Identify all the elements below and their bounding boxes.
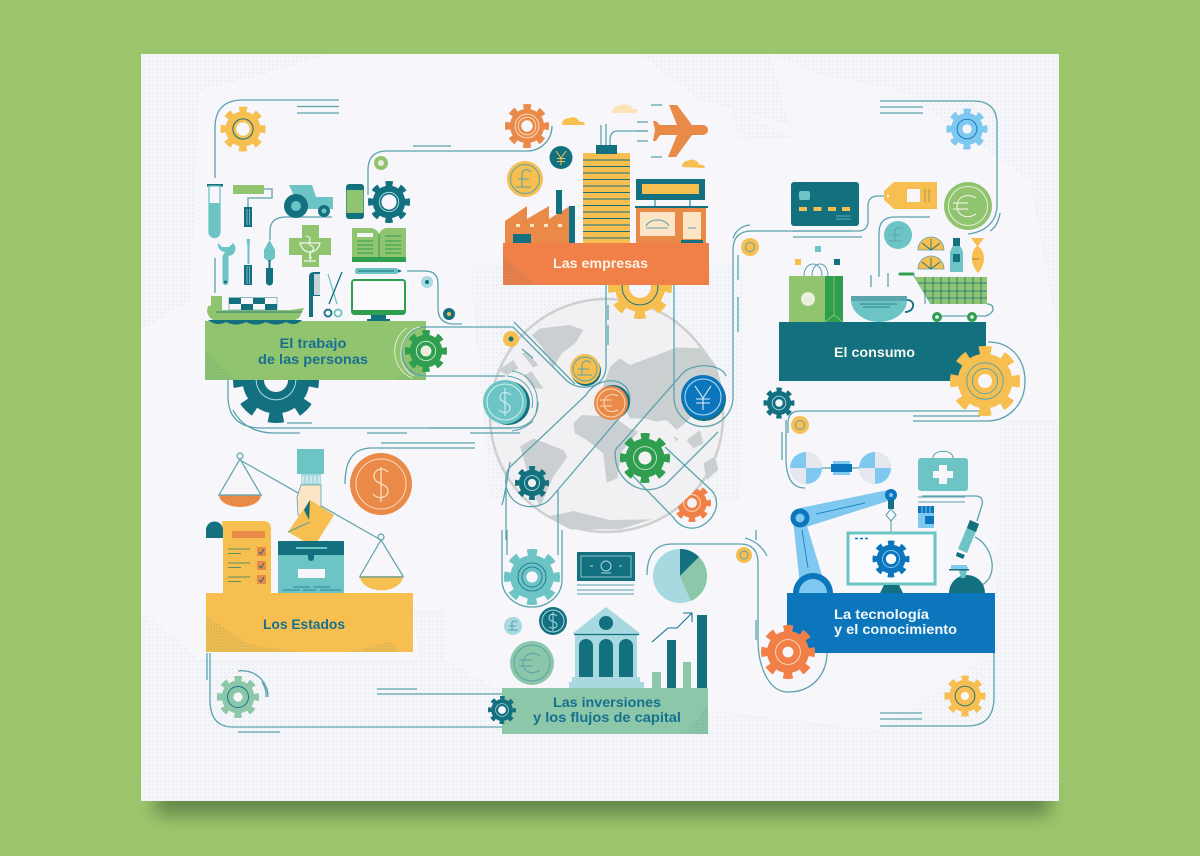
arcs around green gear: [395, 327, 426, 378]
icon: bottle: [950, 238, 963, 272]
gear: mint bottom left: [220, 679, 256, 715]
icon: shopping bag: [789, 246, 843, 322]
icon: open book: [352, 228, 406, 262]
coin: yen: [681, 375, 726, 421]
icon: office tower: [583, 124, 648, 243]
paper stipple texture: [141, 54, 1059, 801]
panel: las inversiones: [502, 688, 708, 734]
icon: tractor: [284, 185, 333, 218]
panel: el consumo: El consumo: [834, 344, 915, 360]
panel: los estados: [206, 593, 413, 652]
icon: ball bearings: [790, 452, 891, 484]
icon: comb: [309, 272, 320, 317]
gear: dark on globe: [517, 468, 547, 498]
icon: price tag: [884, 182, 937, 209]
icon: shopping cart: [900, 274, 993, 322]
world globe: [490, 299, 723, 532]
panel: el trabajo de las personas: [205, 321, 426, 380]
icon: paint roller: [233, 185, 272, 227]
panel: las inversiones: y los flujos de capital: [533, 709, 681, 725]
icon: tea cup: [851, 296, 913, 322]
panel: el consumo: [779, 322, 986, 381]
gear: orange top: [508, 107, 546, 145]
icon: scissors: [324, 272, 342, 316]
panel: el trabajo de las personas: El trabajo: [280, 335, 346, 351]
icon: airplane: [637, 105, 708, 157]
gear: teal capital: [507, 552, 557, 602]
icon: container ship: [207, 258, 304, 324]
icon: medicine jar: [918, 506, 934, 528]
coin: euro: [594, 385, 630, 420]
gear: blue top right: [949, 111, 985, 147]
icon: bank building: [569, 607, 644, 688]
coin: pound pale: [504, 617, 522, 635]
icon: shop with sign: [635, 179, 708, 243]
icon: first aid kit: [918, 451, 968, 502]
icon: computer monitor: [352, 280, 405, 321]
panel: la tecnologia: La tecnología: [834, 606, 929, 622]
icon: microscope: [949, 520, 985, 593]
connector lines: [207, 100, 1025, 732]
icon: shovel: [264, 240, 275, 286]
icon: wrench: [218, 243, 235, 285]
icon: monitor with gear: [848, 533, 935, 593]
paper card: [141, 54, 1059, 801]
infographic canvas: [141, 54, 1060, 826]
gear: orange on globe: [675, 486, 709, 520]
icon: robot arm: [790, 489, 897, 593]
icon: lemon slices: [918, 237, 944, 269]
icon: pencil: [355, 268, 402, 274]
coin: dollar: [483, 380, 530, 425]
icon: yen coin dark: [550, 146, 572, 169]
pie chart: [653, 549, 707, 603]
icon: pound coin yellow: [507, 161, 543, 197]
icon: mobile phone: [346, 184, 364, 219]
icon: hand with ballot: [288, 449, 334, 547]
gear: small dark consumo: [765, 389, 793, 417]
gear: large dark behind trabajo: [238, 342, 314, 418]
coin: dollar orange: [350, 453, 412, 515]
gear: large yellow consumo: [954, 350, 1016, 412]
panel: las inversiones: Las inversiones: [553, 694, 661, 710]
coin: dollar dark: [539, 607, 567, 635]
card shadow: [155, 785, 1050, 815]
gear: green on trabajo panel: [408, 333, 444, 369]
panel: los estados: Los Estados: [263, 616, 345, 632]
panel: las empresas: Las empresas: [553, 255, 648, 271]
icon: ballot box: [278, 541, 344, 593]
gear: orange tecnologia: [764, 628, 812, 676]
icon: test tube: [207, 184, 223, 238]
arcs around dollar coin: [507, 371, 537, 431]
panel: la tecnologia: y el conocimiento: [834, 621, 957, 637]
small connector nodes: [374, 156, 809, 563]
icon: left scale: [218, 453, 381, 540]
gear: dark beside phone: [371, 184, 407, 220]
icon: checklist scroll: [206, 521, 271, 593]
icon: pharmacy cross: [289, 225, 331, 267]
gear: green on globe: [623, 436, 667, 480]
icon: credit card: [791, 182, 859, 226]
gear: yellow top left: [223, 109, 263, 149]
icon: banknote: [577, 552, 635, 594]
icon: clouds: [562, 104, 705, 168]
panel: el trabajo de las personas: de las personas: [258, 351, 368, 367]
icon: fish: [971, 238, 984, 273]
icon: euro coin green: [944, 182, 992, 230]
panel: la tecnologia: [787, 593, 995, 653]
icon: factory: [505, 190, 575, 243]
coin: pound: [570, 354, 601, 386]
gear: yellow behind empresas: [612, 259, 668, 315]
icon: right scale: [359, 534, 404, 590]
coin: euro mint: [510, 641, 554, 685]
gear: yellow bottom right: [947, 678, 983, 714]
icon: pound coin teal: [884, 221, 912, 249]
icon: screwdriver: [244, 239, 252, 285]
continents: [498, 325, 723, 529]
bar chart with arrow: [652, 613, 707, 688]
panel: las empresas: [503, 243, 709, 285]
gear: dark inversiones: [490, 698, 514, 722]
